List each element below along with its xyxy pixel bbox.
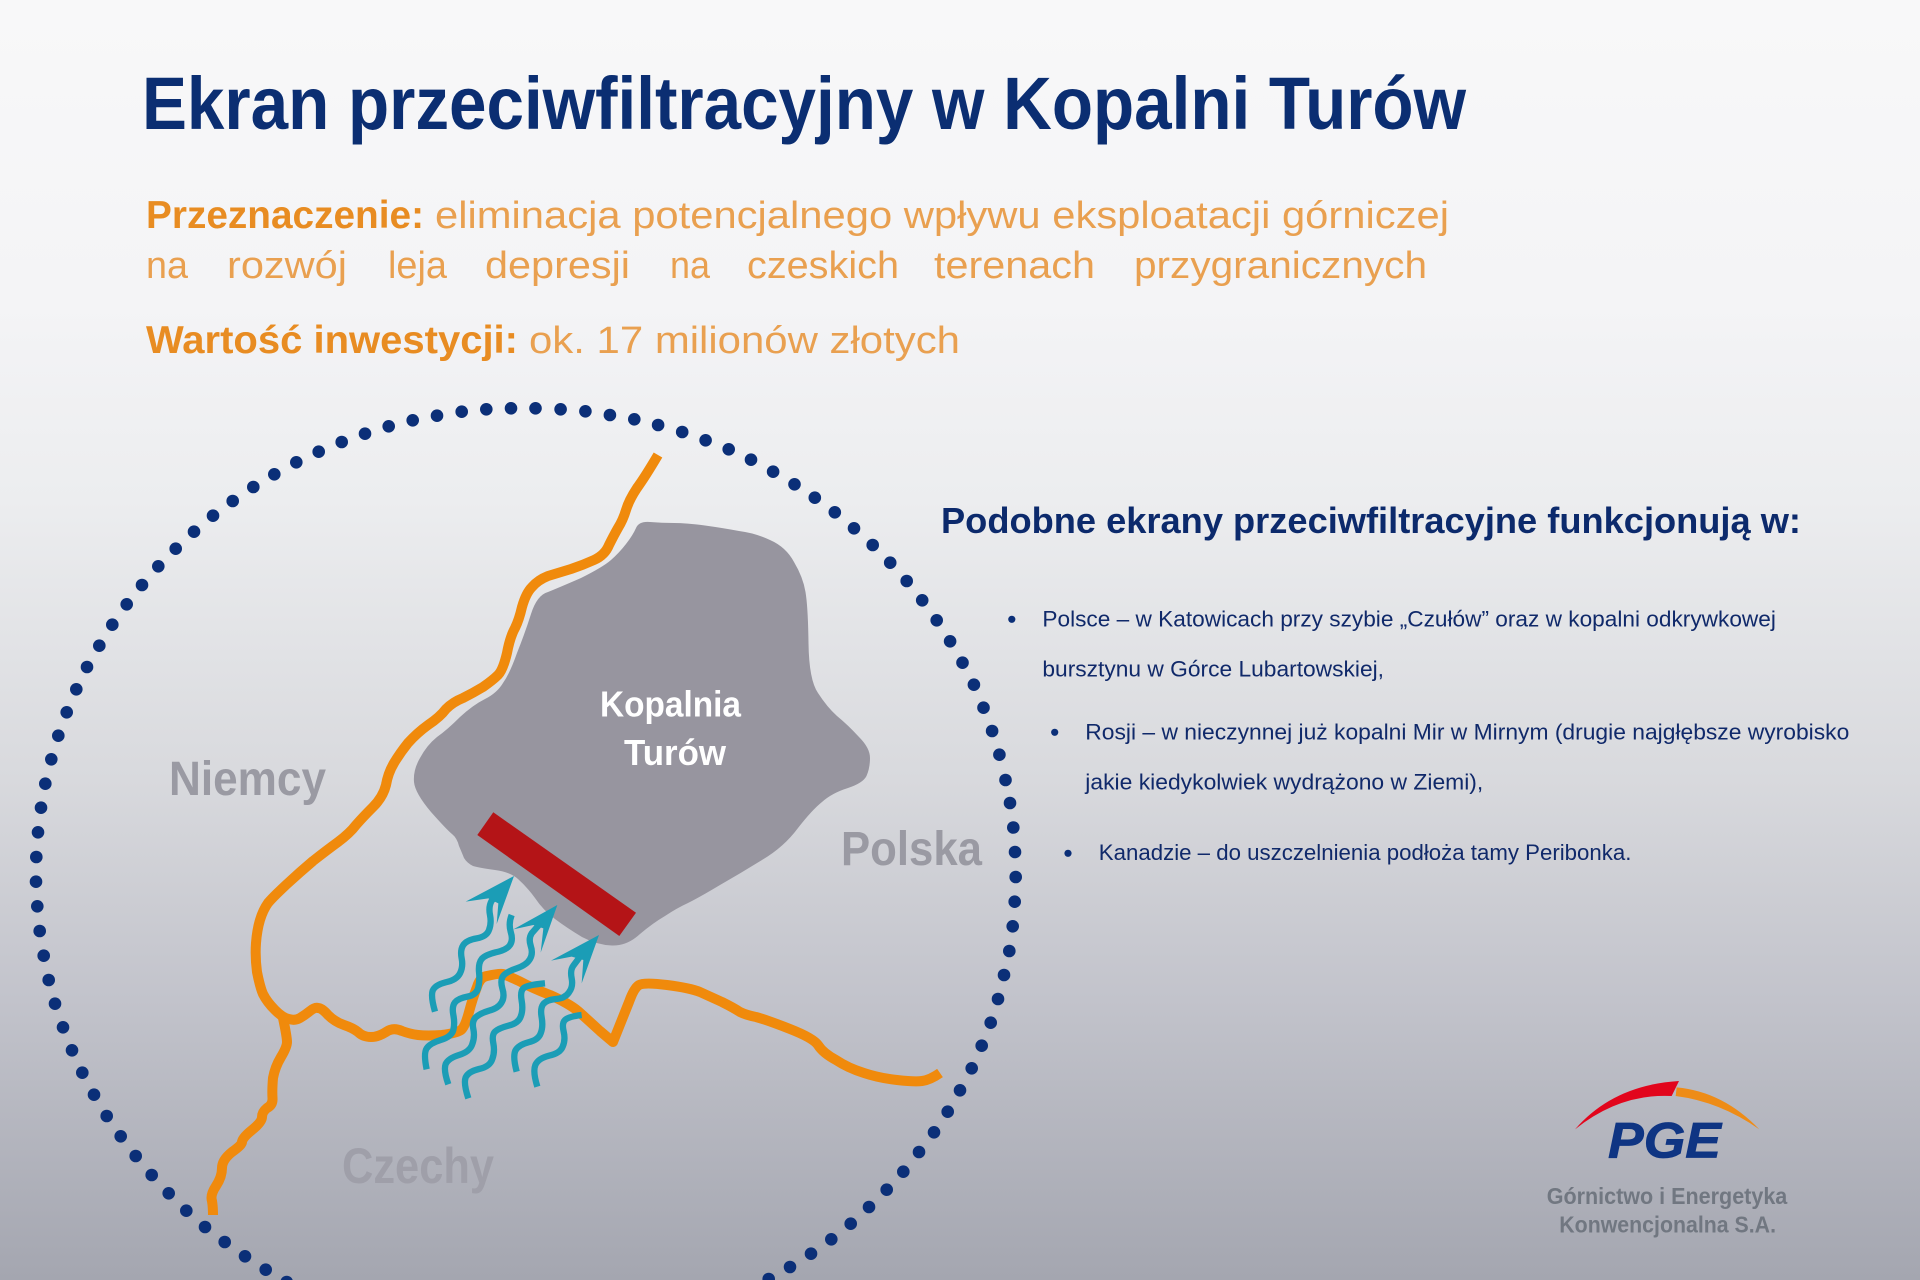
logo wordmark: PGE <box>1608 1112 1723 1168</box>
border lines <box>212 455 940 1215</box>
bullet: Kanada: Kanadzie – do uszczelnienia podłoża tamy Peribonka. <box>1099 840 1631 865</box>
label: Kopalnia Turów: Turów <box>624 732 727 773</box>
text block: investment value <box>146 319 960 362</box>
logo company name <box>1547 1183 1787 1237</box>
text block: purpose: rozwój <box>227 245 347 287</box>
text block: purpose: na <box>146 245 189 287</box>
logo arcs <box>1575 1081 1759 1129</box>
PGE logo <box>1547 1081 1787 1237</box>
text block: purpose: leja <box>388 245 448 287</box>
text block: investment value: Wartość inwestycji: <box>146 319 518 362</box>
label: Kopalnia Turów <box>600 684 742 773</box>
logo company name: Konwencjonalna S.A. <box>1559 1211 1776 1237</box>
label: Polska: Polska <box>841 823 982 876</box>
bullet: Rosja <box>1051 719 1849 794</box>
heading: similar screens: Podobne ekrany przeciwfiltracyjne funkcjonują w: <box>941 500 1801 541</box>
border: Germany–Poland and Poland–Czechia <box>256 455 940 1081</box>
label: Niemcy: Niemcy <box>169 753 326 806</box>
bullet: Polska <box>1008 607 1776 682</box>
bullet list <box>1008 607 1849 865</box>
mine area <box>414 522 870 946</box>
bullet: Polska: bursztynu w Górce Lubartowskiej, <box>1042 657 1384 682</box>
groundwater flow arrows <box>425 876 599 1098</box>
label: Kopalnia Turów: Kopalnia <box>600 684 742 725</box>
text block: purpose: na <box>670 245 711 287</box>
bullet: Rosja: Rosji – w nieczynnej już kopalni Mir w Mirnym (drugie najgłębsze wyrobisko <box>1085 719 1849 744</box>
dotted circle <box>36 408 1016 1280</box>
logo company name: Górnictwo i Energetyka <box>1547 1183 1787 1209</box>
text block: purpose <box>146 194 1449 287</box>
text block: purpose: depresji <box>485 245 630 287</box>
text block: purpose: przygranicznych <box>1134 245 1427 287</box>
text block: purpose: eliminacja potencjalnego wpływu eksploatacji górniczej <box>435 195 1449 237</box>
title: Ekran przeciwfiltracyjny w Kopalni Turów <box>142 62 1466 145</box>
text block: investment value: ok. 17 milionów złotych <box>529 320 960 362</box>
text block: purpose: Przeznaczenie: <box>146 194 424 237</box>
filtration screen (red bar) <box>477 812 636 936</box>
text block: purpose: czeskich <box>747 245 899 287</box>
label: Czechy: Czechy <box>342 1138 494 1194</box>
bullet: Polska: Polsce – w Katowicach przy szybie „Czułów” oraz w kopalni odkrywkowej <box>1042 607 1776 632</box>
text block: purpose: terenach <box>934 245 1095 287</box>
border: Germany–Czechia <box>212 1018 287 1215</box>
bullet: Rosja: jakie kiedykolwiek wydrążono w Ziemi), <box>1084 769 1483 794</box>
